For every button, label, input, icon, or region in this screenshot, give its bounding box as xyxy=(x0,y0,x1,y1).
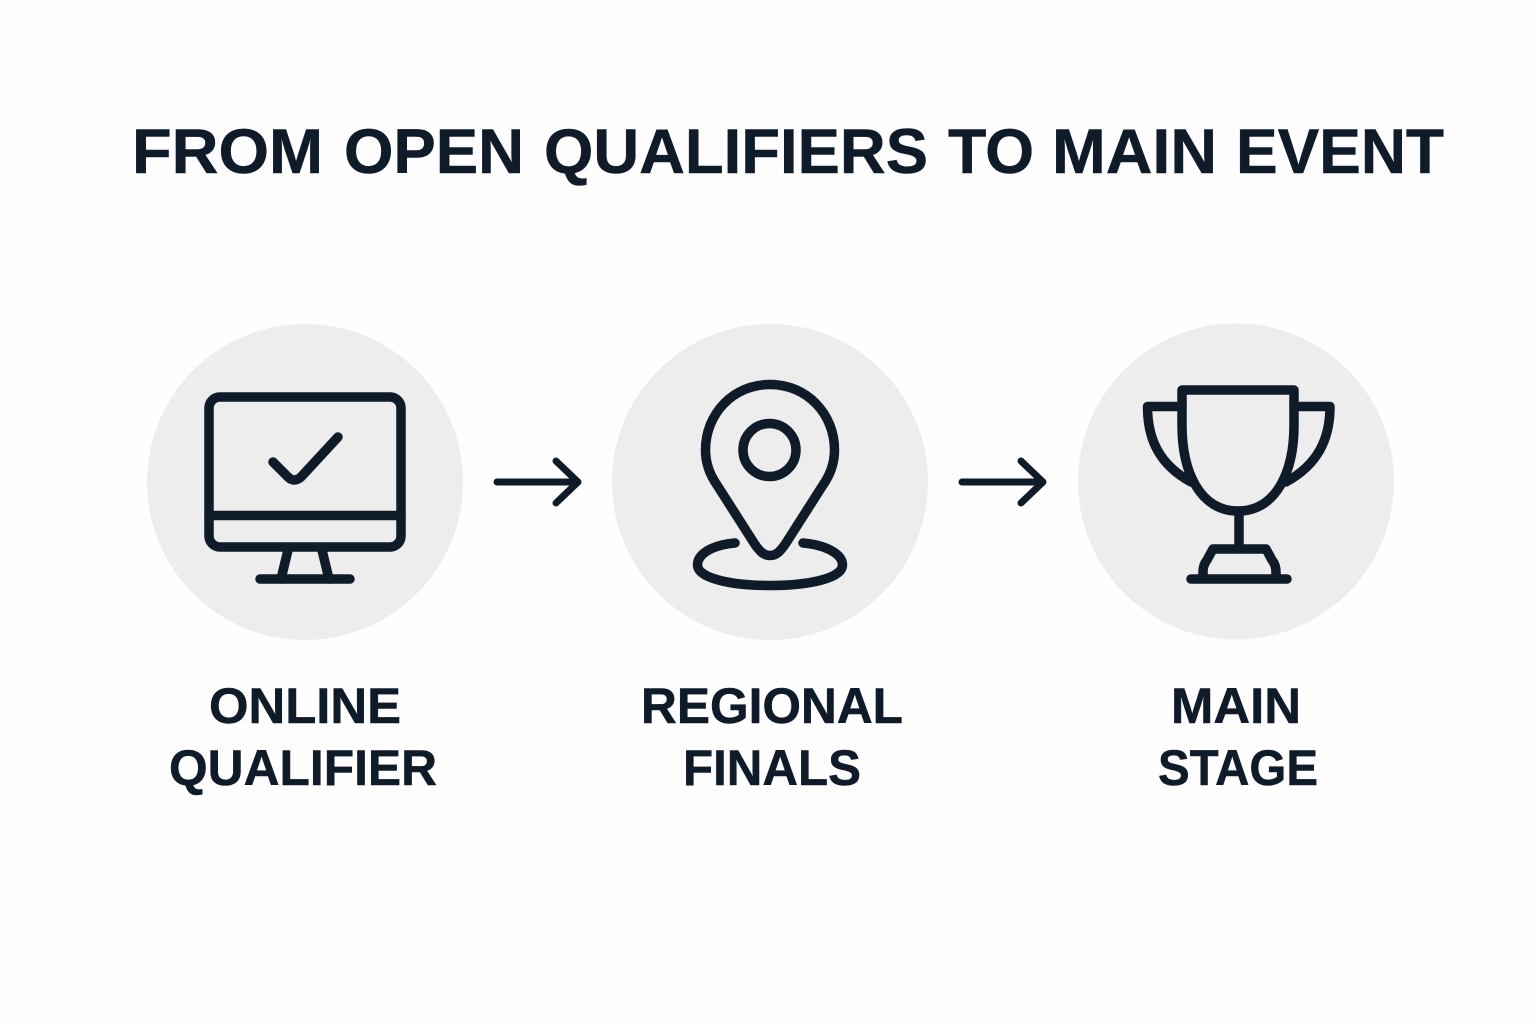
icon: monitor with check mark xyxy=(209,397,401,579)
title: OPEN xyxy=(344,117,524,187)
arrow 2 xyxy=(962,461,1043,503)
arrow 1 xyxy=(497,461,578,503)
step 3 label: STAGE xyxy=(1158,740,1318,796)
step 1 label: ONLINE xyxy=(209,678,401,734)
step 3: main stage xyxy=(1078,324,1394,796)
step 1 label xyxy=(169,678,437,796)
title: TO xyxy=(948,117,1034,187)
step 3 label xyxy=(1158,678,1318,796)
title: MAIN xyxy=(1052,117,1217,187)
step 2 circle xyxy=(612,324,928,640)
title: FROM xyxy=(132,117,323,187)
step 2 label xyxy=(641,678,903,796)
icon: trophy xyxy=(1148,390,1330,579)
step 1: online qualifier xyxy=(147,324,463,796)
step 2: regional finals xyxy=(612,324,928,796)
step 2 label: REGIONAL xyxy=(641,678,903,734)
icon: map pin on ring xyxy=(698,384,842,586)
step 1 circle xyxy=(147,324,463,640)
title: QUALIFIERS xyxy=(544,117,928,187)
step 3 label: MAIN xyxy=(1171,678,1301,734)
step 1 label: QUALIFIER xyxy=(169,740,437,796)
step 3 circle xyxy=(1078,324,1394,640)
title: EVENT xyxy=(1236,117,1444,187)
step 2 label: FINALS xyxy=(683,740,861,796)
